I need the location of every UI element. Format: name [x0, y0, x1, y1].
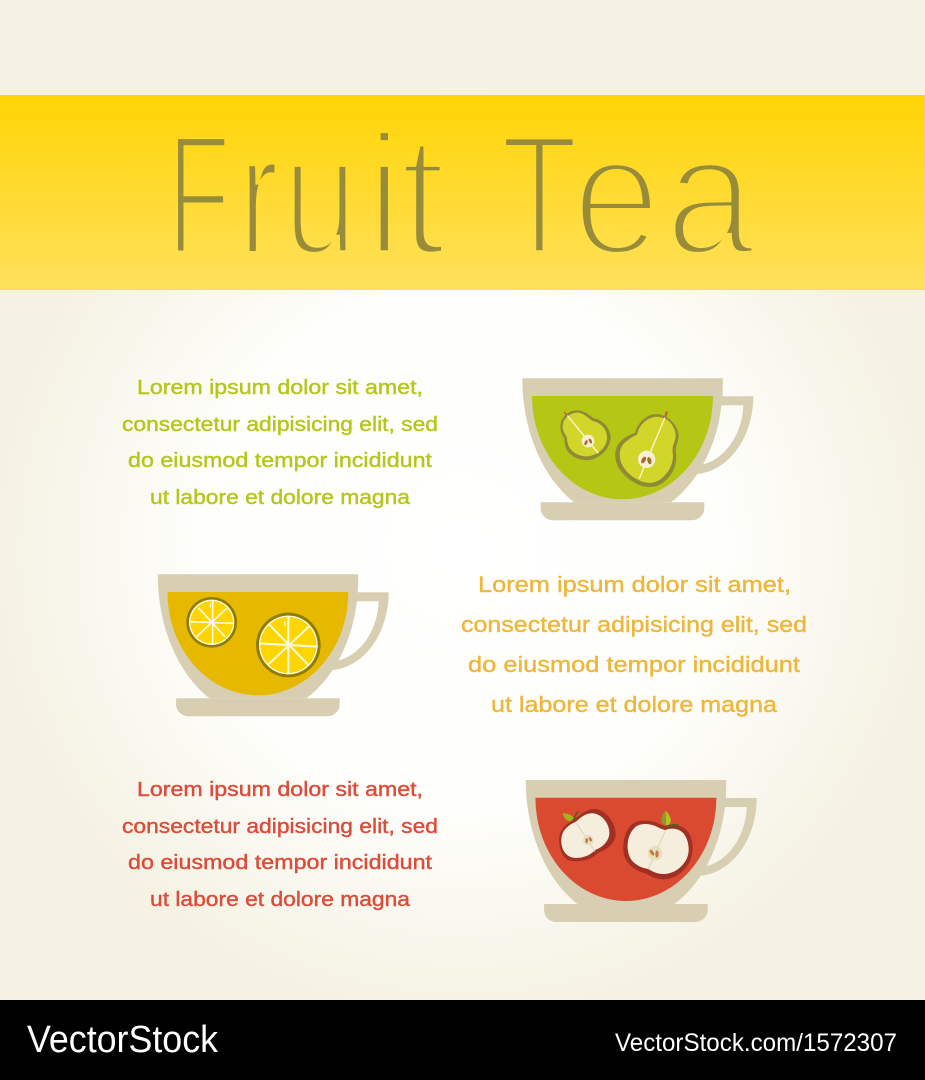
title: Fruit Tea: a — [665, 99, 755, 291]
text block: red: consectetur adipisicing elit, sed — [122, 816, 438, 838]
cup: lemon tea — [158, 574, 389, 716]
text block: red — [122, 779, 438, 911]
text block: green: do eiusmod tempor incididunt — [128, 450, 433, 472]
text block: orange: do eiusmod tempor incididunt — [468, 652, 800, 677]
cup: pear tea — [522, 378, 753, 520]
cup: apple tea — [526, 780, 757, 922]
text block: orange — [461, 572, 807, 717]
title: Fruit Tea: r — [240, 100, 278, 291]
text block: red: do eiusmod tempor incididunt — [128, 852, 433, 874]
icon: pears — [560, 410, 679, 487]
title: Fruit Tea: T — [500, 99, 578, 292]
text block: orange: Lorem ipsum dolor sit amet, — [478, 572, 791, 597]
text block: green: ut labore et dolore magna — [150, 487, 411, 509]
title: Fruit Tea: i — [366, 98, 403, 291]
footer url: VectorStock.com/1572307 — [615, 1029, 897, 1057]
text block: green — [122, 377, 438, 509]
title: Fruit Tea: t — [400, 98, 446, 291]
title: Fruit Tea — [168, 98, 755, 292]
text block: red: Lorem ipsum dolor sit amet, — [137, 779, 423, 801]
text block: red: ut labore et dolore magna — [150, 889, 411, 911]
title banner — [0, 95, 925, 292]
text block: orange: ut labore et dolore magna — [491, 692, 778, 717]
text block: green: Lorem ipsum dolor sit amet, — [137, 377, 423, 399]
icon: apples — [559, 809, 693, 879]
title: Fruit Tea: e — [572, 99, 661, 291]
icon: lemons — [186, 597, 321, 677]
text block: green: consectetur adipisicing elit, sed — [122, 414, 438, 436]
title: Fruit Tea: u — [283, 98, 358, 291]
footer logo: VectorStock — [27, 1019, 219, 1061]
text block: orange: consectetur adipisicing elit, sed — [461, 612, 807, 637]
title: Fruit Tea: F — [168, 100, 231, 292]
footer bar — [0, 1000, 925, 1080]
